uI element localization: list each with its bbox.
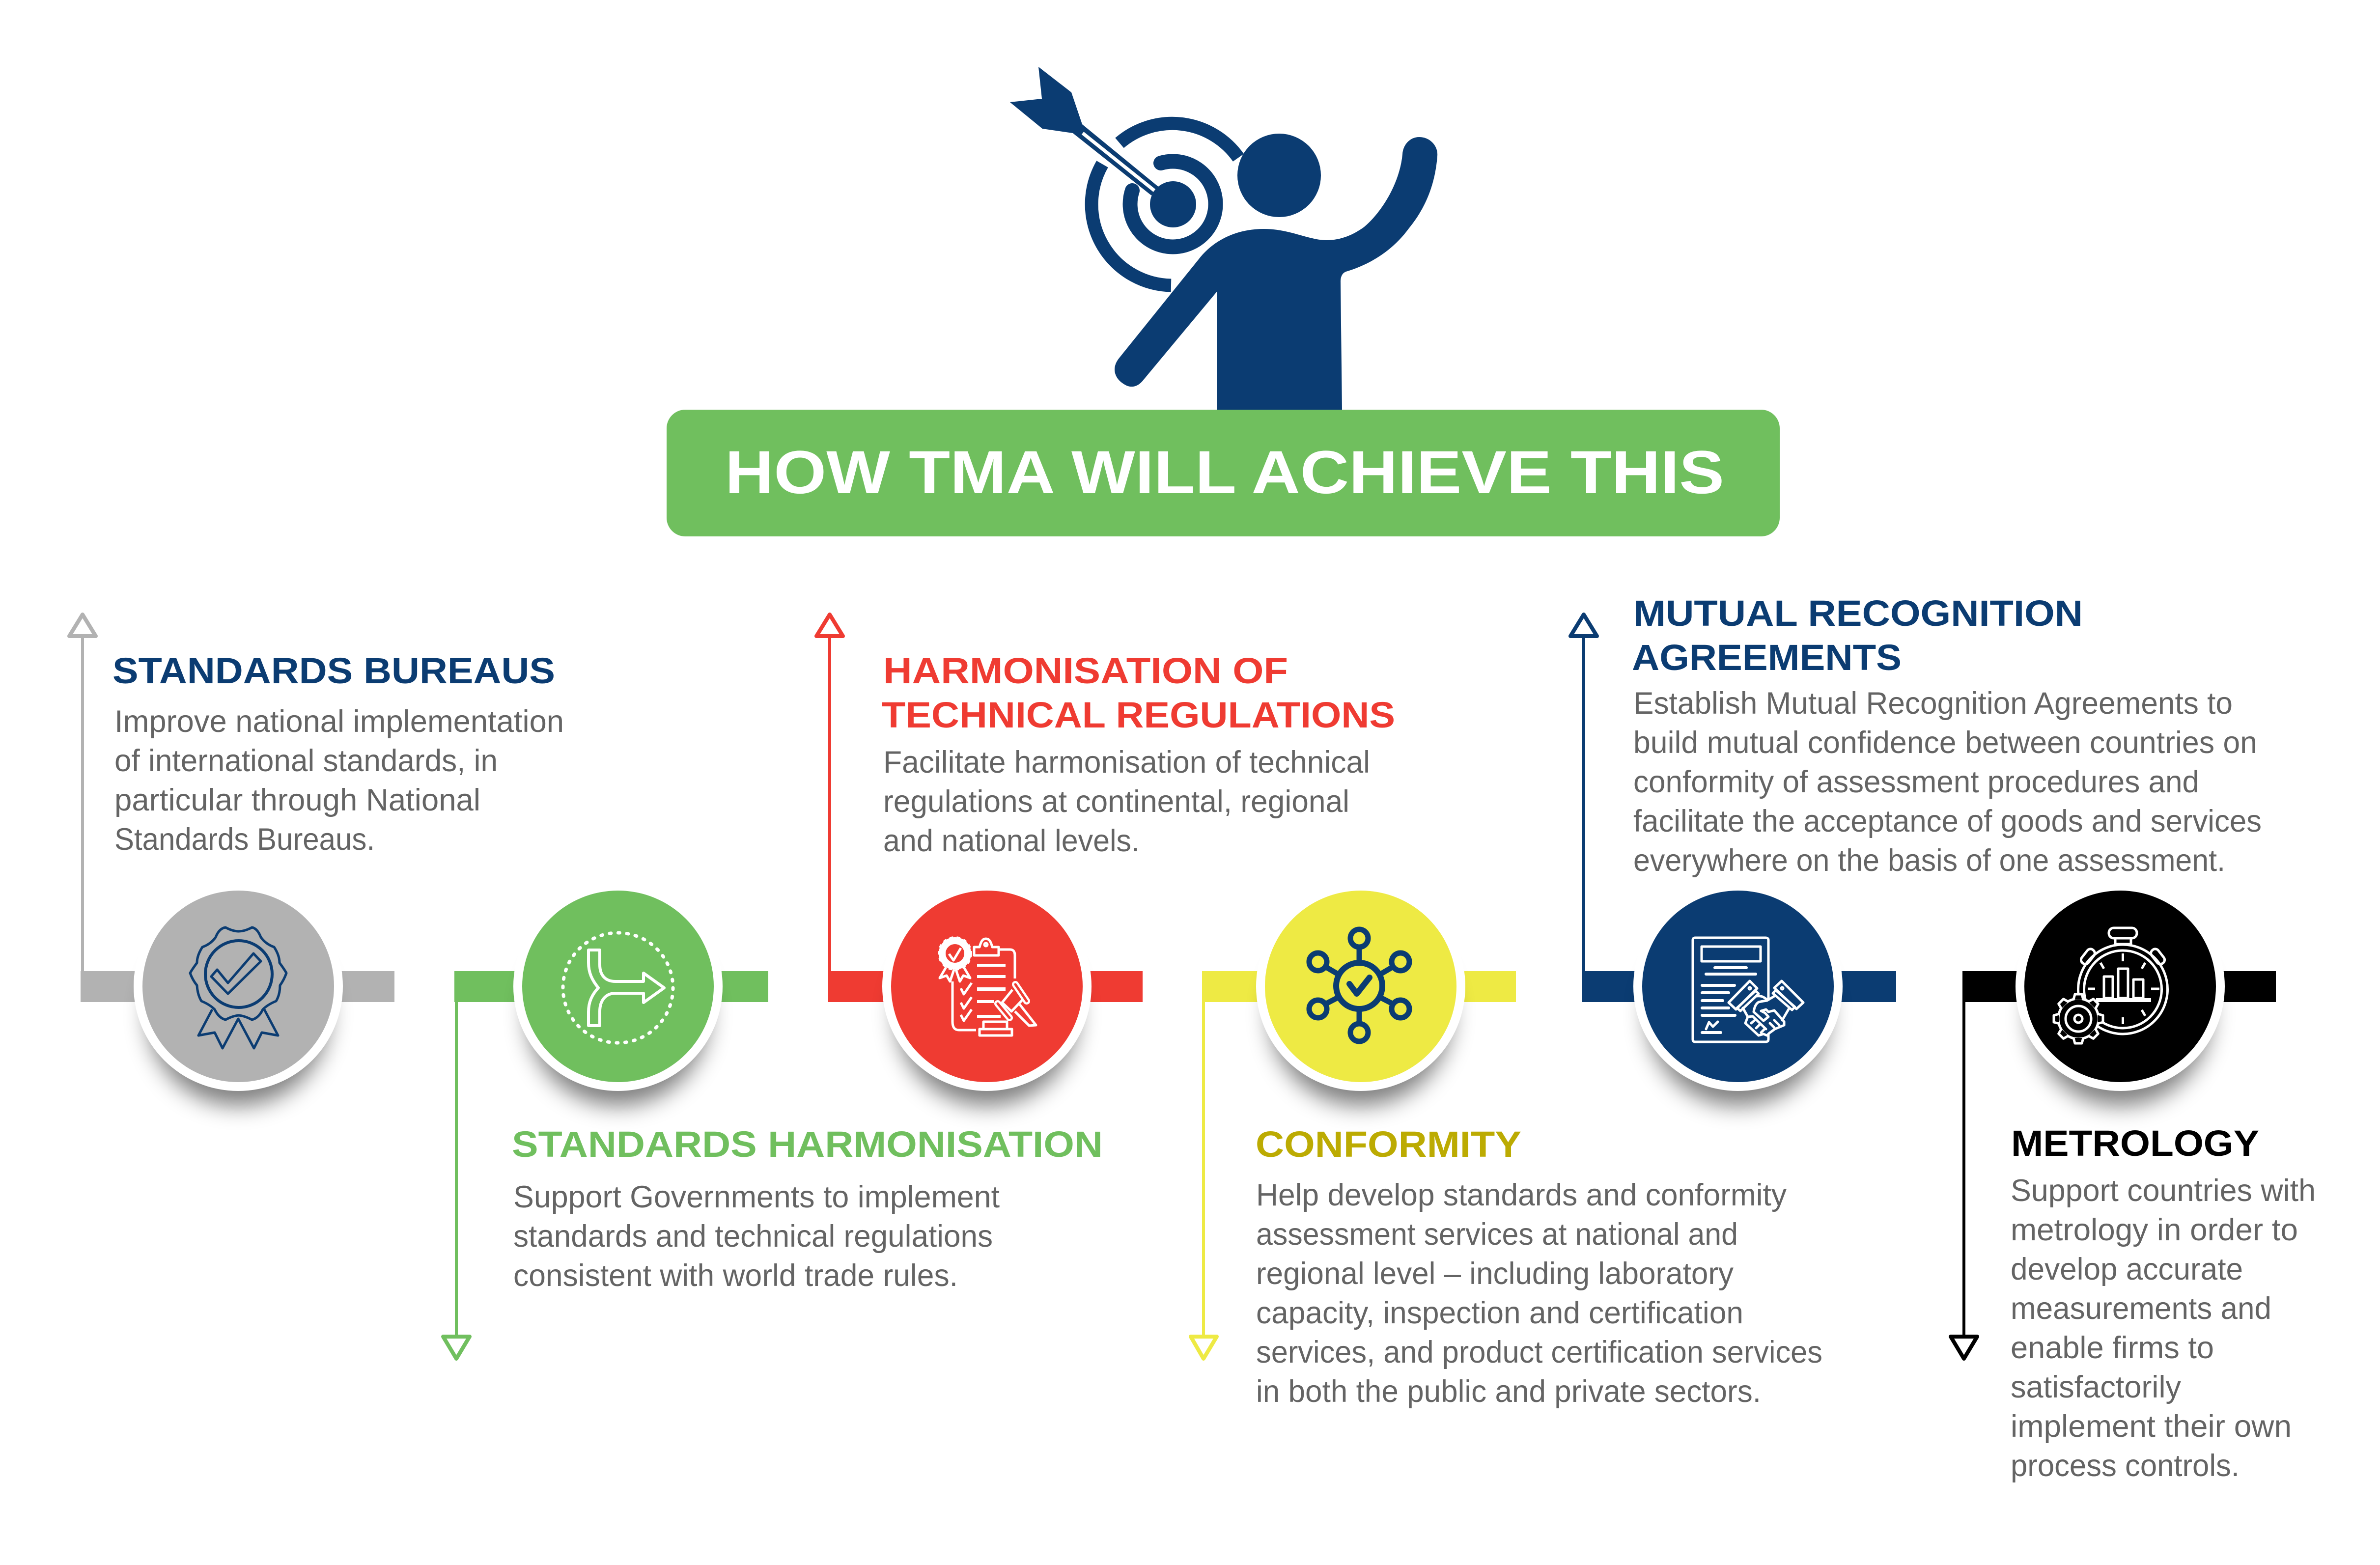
icon badge: agreement and handshake: [1633, 882, 1843, 1106]
arrow down: [1951, 997, 1977, 1359]
body text: regulations at continental, regional: [883, 784, 1349, 819]
connector bar: [454, 971, 768, 1002]
panel: conformity: [1191, 882, 1822, 1409]
body text: [1633, 686, 2262, 878]
icon badge: stopwatch and gear: [2016, 882, 2225, 1106]
icon badge: network with check: [1256, 882, 1465, 1106]
body text: and national levels.: [883, 824, 1140, 858]
connector bar: [1202, 971, 1516, 1002]
heading: TECHNICAL REGULATIONS: [882, 695, 1395, 735]
heading: STANDARDS BUREAUS: [112, 650, 555, 691]
body text: [2011, 1174, 2316, 1483]
body text: [513, 1180, 1000, 1293]
arrow down: [443, 997, 470, 1359]
body text: build mutual confidence between countries on: [1633, 726, 2257, 760]
body text: in both the public and private sectors.: [1256, 1374, 1761, 1409]
body text: measurements and: [2011, 1291, 2271, 1326]
connector bar: [1962, 971, 2276, 1002]
body text: satisfactorily: [2011, 1370, 2181, 1404]
target rings: [1092, 123, 1238, 285]
arrow up: [1570, 615, 1597, 976]
heading: AGREEMENTS: [1632, 637, 1902, 678]
body text: Support countries with: [2011, 1174, 2316, 1208]
panel: metrology: [1951, 882, 2316, 1483]
body text: Establish Mutual Recognition Agreements to: [1633, 686, 2233, 721]
body text: of international standards, in: [114, 744, 498, 778]
body text: [1256, 1178, 1822, 1409]
heading: METROLOGY: [2011, 1123, 2259, 1164]
heading: HARMONISATION OF: [883, 650, 1288, 691]
panel: harmonisation of technical regulations: [816, 615, 1395, 1106]
body text: develop accurate: [2011, 1252, 2243, 1286]
icon: person with target and arrow: [1010, 67, 1437, 410]
body text: assessment services at national and: [1256, 1217, 1738, 1252]
body text: [883, 745, 1370, 858]
person figure: [1115, 134, 1437, 410]
body text: consistent with world trade rules.: [513, 1258, 958, 1293]
body text: Support Governments to implement: [513, 1180, 1000, 1214]
body text: regional level – including laboratory: [1256, 1257, 1734, 1291]
heading: [882, 650, 1395, 735]
body text: particular through National: [114, 783, 480, 817]
body text: capacity, inspection and certification: [1256, 1296, 1743, 1330]
body text: Improve national implementation: [114, 704, 564, 739]
body text: standards and technical regulations: [513, 1219, 993, 1254]
body text: facilitate the acceptance of goods and services: [1633, 804, 2262, 838]
icon badge: merging arrow: [513, 882, 723, 1106]
title: HOW TMA WILL ACHIEVE THIS: [725, 439, 1724, 506]
body text: Help develop standards and conformity: [1256, 1178, 1787, 1212]
body text: enable firms to: [2011, 1331, 2214, 1365]
body text: implement their own: [2011, 1409, 2292, 1444]
heading: [1632, 593, 2083, 678]
body text: everywhere on the basis of one assessment.: [1633, 843, 2225, 878]
heading: STANDARDS HARMONISATION: [512, 1124, 1103, 1165]
body text: metrology in order to: [2011, 1213, 2298, 1247]
title banner: [667, 410, 1780, 536]
heading: MUTUAL RECOGNITION: [1633, 593, 2083, 634]
body text: process controls.: [2011, 1449, 2240, 1483]
arrow up: [69, 615, 96, 976]
heading: CONFORMITY: [1256, 1124, 1521, 1165]
panel: standards harmonisation: [443, 882, 1103, 1359]
arrow down: [1191, 997, 1217, 1359]
connector bar: [828, 971, 1143, 1002]
icon badge: checklist, seal and gavel: [882, 882, 1092, 1106]
body text: conformity of assessment procedures and: [1633, 765, 2199, 799]
connector bar: [1582, 971, 1896, 1002]
body text: services, and product certification services: [1256, 1335, 1822, 1369]
panel: mutual recognition agreements: [1570, 593, 2262, 1106]
body text: Facilitate harmonisation of technical: [883, 745, 1370, 780]
icon badge: rosette: [134, 882, 343, 1106]
dart: [1010, 67, 1158, 196]
panel: standards bureaus: [69, 615, 564, 1106]
arrow up: [816, 615, 843, 976]
body text: Standards Bureaus.: [114, 822, 375, 857]
connector bar: [81, 971, 394, 1002]
body text: [114, 704, 564, 857]
